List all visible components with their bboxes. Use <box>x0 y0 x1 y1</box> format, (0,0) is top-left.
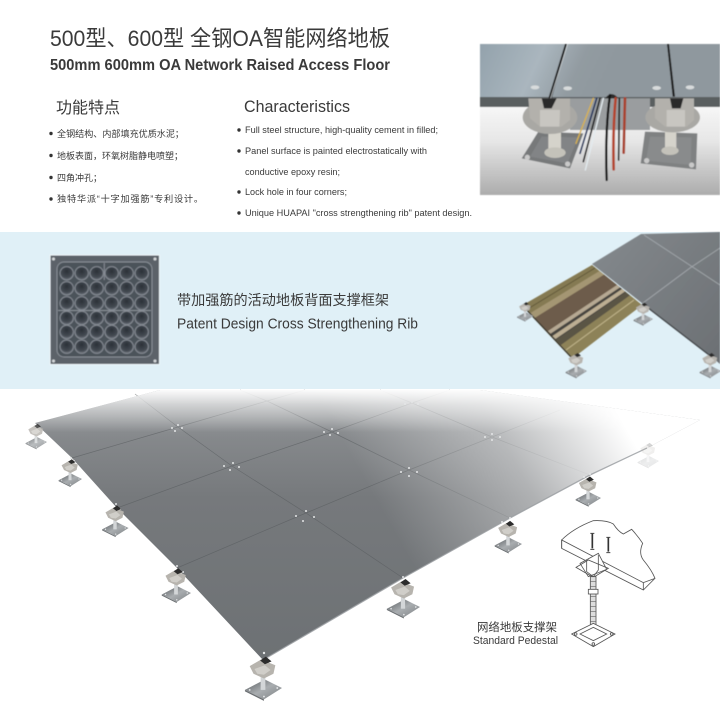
pedestal: right 2 <box>495 521 522 553</box>
text block: characteristics in English: conductive epoxy resin; <box>245 167 340 177</box>
pedestal: left 4 <box>162 568 191 603</box>
pedestal: right 1 <box>387 579 420 618</box>
corner screws <box>70 401 591 654</box>
pedestal: left <box>522 98 583 168</box>
panel: blue band <box>0 232 720 389</box>
main raised floor <box>35 390 700 660</box>
line drawing: standard pedestal <box>562 521 655 647</box>
pedestal: left 1 <box>26 424 47 449</box>
small pedestal: carpet left <box>517 302 533 322</box>
text block: characteristics in English: Full steel structure, high-quality cement in filled; <box>245 125 438 135</box>
text block: features in Chinese <box>49 128 203 204</box>
text block: features in Chinese: 独特华派“十字加强筋”专利设计。 <box>57 193 203 204</box>
panel seams <box>72 390 590 578</box>
steel panels <box>592 232 720 364</box>
pedestal: right 3 <box>576 477 601 507</box>
photo: wiring under raised floor <box>480 44 720 195</box>
text block: features in Chinese: 全钢结构、内部填充优质水泥； <box>57 128 184 139</box>
pedestal label: English: Standard Pedestal <box>473 635 558 647</box>
text block: characteristics in English: Unique HUAPAI "cross strengthening rib" patent design. <box>245 208 472 218</box>
text block: characteristics in English <box>237 125 472 218</box>
text block: features in Chinese: 地板表面，环氧树脂静电喷塑； <box>57 150 183 161</box>
title: English: 500mm 600mm OA Network Raised Access Floor <box>50 57 390 74</box>
pedestal: faded far right <box>638 443 659 468</box>
text block: characteristics in English: Lock hole in four corners; <box>245 187 347 197</box>
carpet tile <box>523 265 642 360</box>
band text: English: Patent Design Cross Strengthening Rib <box>177 316 418 332</box>
heading: Characteristics: Characteristics <box>244 97 350 116</box>
pedestal: left 3 <box>102 506 129 537</box>
band text: Chinese: 带加强筋的活动地板背面支撑框架 <box>177 292 389 308</box>
heading: features in Chinese: 功能特点 <box>56 99 120 117</box>
pedestal: left 2 <box>59 459 82 487</box>
illustration: carpet tile and steel panels <box>517 232 720 378</box>
wires <box>576 95 625 180</box>
title: Chinese: 500型、600型 全钢OA智能网络地板 <box>50 26 390 51</box>
pedestal label: Chinese: 网络地板支撑架 <box>477 620 557 634</box>
small pedestal: far right <box>700 353 720 378</box>
text block: characteristics in English: Panel surface is painted electrostatically with <box>245 146 427 156</box>
small pedestal: carpet right <box>634 302 653 326</box>
pedestal: right <box>641 98 700 169</box>
text block: features in Chinese: 四角冲孔； <box>57 172 102 183</box>
illustration: panel underside with dimples <box>50 255 160 364</box>
small pedestal: carpet bottom <box>566 353 587 378</box>
pedestal: front corner <box>245 657 282 701</box>
